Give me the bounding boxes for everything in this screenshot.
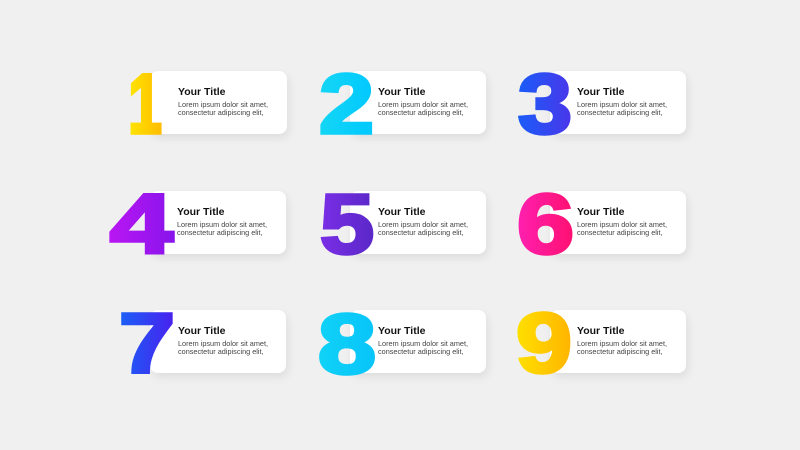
number 8: 8 — [318, 297, 376, 391]
text 8: consectetur adipiscing elit, — [378, 347, 464, 356]
text 8: Your Title — [378, 325, 426, 337]
text 9: Your Title — [577, 325, 625, 337]
card 8 — [350, 310, 486, 373]
text 1: consectetur adipiscing elit, — [178, 108, 264, 117]
text 2: Lorem ipsum dolor sit amet, — [378, 100, 468, 109]
text 7: Lorem ipsum dolor sit amet, — [178, 339, 268, 348]
text 9 — [577, 325, 667, 356]
card 1 — [150, 71, 287, 134]
item 7 — [119, 296, 286, 390]
item 2 — [319, 57, 486, 151]
text 1: Lorem ipsum dolor sit amet, — [178, 100, 268, 109]
text 9: Lorem ipsum dolor sit amet, — [577, 339, 667, 348]
number 1: 1 — [128, 57, 162, 151]
text 5: Your Title — [378, 206, 426, 218]
number 4: 4 — [110, 177, 173, 271]
text 4: consectetur adipiscing elit, — [177, 228, 263, 237]
text 6: Your Title — [577, 206, 625, 218]
number 5: 5 — [320, 177, 374, 271]
text 8 — [378, 325, 468, 356]
item 6 — [517, 177, 686, 271]
text 5 — [378, 206, 468, 237]
card 5 — [350, 191, 486, 254]
card 2 — [350, 71, 486, 134]
text 3: consectetur adipiscing elit, — [577, 108, 663, 117]
text 1: Your Title — [178, 86, 226, 98]
item 8 — [318, 297, 486, 391]
text 4: Lorem ipsum dolor sit amet, — [177, 220, 267, 229]
item 5 — [320, 177, 486, 271]
number 2: 2 — [319, 57, 374, 151]
text 4: Your Title — [177, 206, 225, 218]
item 3 — [518, 57, 686, 151]
card 7 — [150, 310, 286, 373]
text 7: Your Title — [178, 325, 226, 337]
text 8: Lorem ipsum dolor sit amet, — [378, 339, 468, 348]
text 3 — [577, 86, 667, 117]
text 1 — [178, 86, 268, 117]
text 6 — [577, 206, 667, 237]
text 6: consectetur adipiscing elit, — [577, 228, 663, 237]
number 6: 6 — [517, 177, 574, 271]
text 7: consectetur adipiscing elit, — [178, 347, 264, 356]
item 4 — [110, 177, 286, 271]
text 4 — [177, 206, 267, 237]
text 3: Your Title — [577, 86, 625, 98]
number 7: 7 — [119, 296, 175, 390]
text 6: Lorem ipsum dolor sit amet, — [577, 220, 667, 229]
text 5: consectetur adipiscing elit, — [378, 228, 464, 237]
text 2: consectetur adipiscing elit, — [378, 108, 464, 117]
text 5: Lorem ipsum dolor sit amet, — [378, 220, 468, 229]
card 3 — [550, 71, 686, 134]
item 1 — [128, 57, 287, 151]
card 6 — [550, 191, 686, 254]
number 3: 3 — [518, 57, 572, 151]
item 9 — [516, 296, 686, 390]
text 2 — [378, 86, 468, 117]
text 2: Your Title — [378, 86, 426, 98]
number 9: 9 — [516, 296, 572, 390]
card 9 — [550, 310, 686, 373]
text 9: consectetur adipiscing elit, — [577, 347, 663, 356]
text 7 — [178, 325, 268, 356]
card 4 — [150, 191, 286, 254]
text 3: Lorem ipsum dolor sit amet, — [577, 100, 667, 109]
